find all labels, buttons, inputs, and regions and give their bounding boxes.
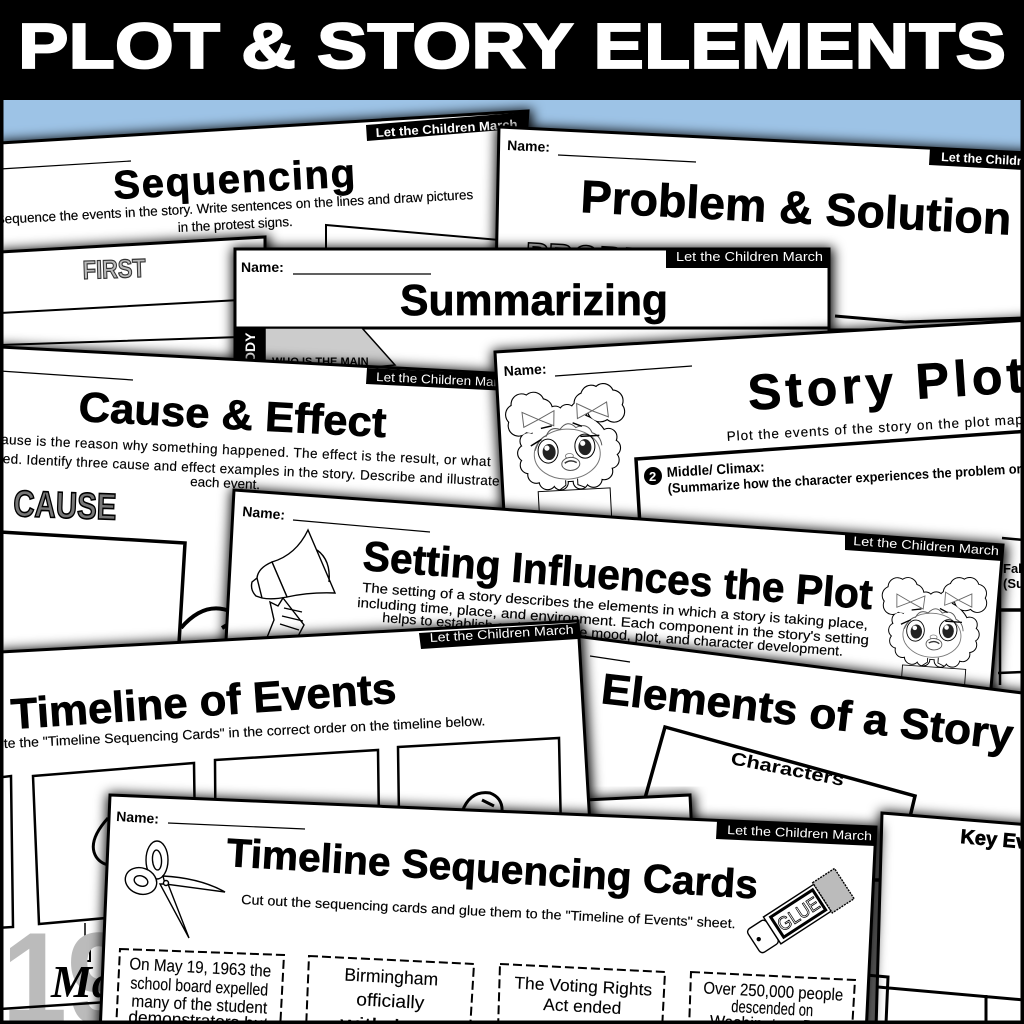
card 1 text: many of the student <box>131 991 268 1018</box>
number badge <box>644 467 662 485</box>
sidebar: body label: BODY <box>242 332 258 373</box>
card 2 text <box>338 965 442 1024</box>
tag: cards: Let the Children March <box>727 823 872 843</box>
illustration: girl with sign <box>875 572 988 707</box>
text: falling action: Fal <box>1003 561 1022 576</box>
name field <box>116 808 305 829</box>
card 2 text: officially <box>356 989 425 1013</box>
icon: scissors <box>122 841 225 938</box>
illustration: girl with sign <box>505 383 630 535</box>
card 4 text: descended on <box>731 997 814 1020</box>
sidebar: body label <box>235 328 265 388</box>
table lines <box>866 975 1024 1024</box>
card 3 text: The Voting Rights <box>514 973 653 1000</box>
name field: Name: <box>116 808 160 827</box>
card 4 <box>689 972 855 1024</box>
label: characters: Characters <box>729 748 846 790</box>
writing lines <box>0 300 240 345</box>
tag: cause <box>366 368 510 391</box>
text: setting description: including time, place, and environment. Each component in the story's setting <box>357 595 870 648</box>
name line <box>0 371 133 380</box>
illustration fragments <box>93 793 502 865</box>
card 1 text <box>128 954 272 1024</box>
name field: Name: <box>241 259 284 275</box>
text: setting description <box>357 580 870 659</box>
panel: cause and effect worksheet <box>0 347 510 660</box>
heading: timeline of events: Timeline of Events <box>9 665 398 739</box>
illustration: megaphone <box>252 530 335 640</box>
lower card <box>585 795 694 880</box>
tag: timeline <box>419 623 578 649</box>
icon: glue stick <box>744 868 854 958</box>
card 3 <box>498 964 665 1024</box>
label: cause: CAUSE <box>13 483 117 528</box>
heading: problem and solution: Problem & Solution <box>579 170 1013 245</box>
text: sequencing instructions: in the protest signs. <box>177 214 293 235</box>
text: timeline instructions: te the "Timeline Sequencing Cards" in the correct order on the timeline below. <box>3 713 486 751</box>
card 4 text: Over 250,000 people <box>703 978 844 1005</box>
icon: glue stick: GLUE <box>774 893 824 936</box>
name line <box>590 656 630 662</box>
panel: elements of a story worksheet <box>575 636 1024 1024</box>
panel: timeline of events worksheet <box>0 621 592 1024</box>
divider <box>235 326 829 330</box>
illustration fragment <box>181 608 232 628</box>
sign box <box>326 225 500 260</box>
card: characters <box>622 727 915 880</box>
heading: elements of a story: Elements of a Story <box>599 665 1016 760</box>
panel: problem and solution worksheet <box>495 127 1024 330</box>
name field: Name: <box>242 503 286 523</box>
timeline boxes <box>0 738 562 928</box>
cause box <box>0 532 185 660</box>
panel: story plot worksheet <box>495 320 1024 710</box>
text: falling action: (Su <box>1003 576 1024 591</box>
title banner <box>0 0 1024 100</box>
name field <box>507 137 696 162</box>
card 1 text: school board expelled <box>130 973 269 1000</box>
card 2 <box>306 956 474 1024</box>
panel: timeline sequencing cards worksheet <box>100 795 876 1024</box>
text: cause instructions: each event. <box>190 474 260 492</box>
card 3 text: Act ended <box>543 995 622 1018</box>
name field <box>503 361 692 379</box>
tag: sequencing: Let the Children March <box>375 117 518 140</box>
tag: summarizing <box>666 249 829 268</box>
script month: Ma <box>50 956 115 1007</box>
heading: setting influences the plot: Setting Influences the Plot <box>361 532 874 618</box>
tag: timeline: Let the Children March <box>429 623 574 645</box>
name line <box>0 161 131 169</box>
heading: summarizing: Summarizing <box>400 276 668 325</box>
text: setting description: helps to establish and shape the mood, plot, and character development. <box>382 610 844 659</box>
tag: summarizing: Let the Children March <box>676 250 823 264</box>
divider line <box>0 1002 108 1009</box>
card 1 text: On May 19, 1963 the <box>129 954 272 981</box>
text: falling action <box>1003 561 1024 591</box>
right plot box fragment <box>998 538 1024 685</box>
name field: Name: <box>503 361 547 379</box>
panel: key events worksheet <box>866 813 1024 1024</box>
plot box: middle climax <box>636 431 1024 610</box>
tag: cause: Let the Children Mar <box>376 370 498 389</box>
tag: setting <box>845 533 1003 561</box>
number badge: 2 <box>649 469 656 484</box>
lower lines <box>835 316 1024 322</box>
heading: timeline sequencing cards: Timeline Sequencing Cards <box>225 831 759 907</box>
text: who is the main: WHO IS THE MAIN <box>272 356 369 368</box>
name field: Name: <box>507 137 550 155</box>
title: PLOT & STORY ELEMENTS <box>18 10 1006 82</box>
panel: first <box>0 237 265 360</box>
panel: summarizing worksheet <box>235 249 829 400</box>
text: middle climax: Middle/ Climax: <box>666 459 765 480</box>
text: cards instructions: Cut out the sequencing cards and glue them to the "Timeline of Events" sheet. <box>241 892 736 931</box>
tag: cards <box>716 821 876 846</box>
label: first: FIRST <box>82 253 146 285</box>
panel: sequencing worksheet <box>0 111 528 360</box>
card 1 <box>116 949 284 1024</box>
text: sequencing instructions: Sequence the events in the story. Write sentences on the lines and draw pictures <box>0 187 474 227</box>
hanging tag <box>81 923 90 961</box>
name field <box>242 503 430 532</box>
card 4 text <box>703 978 844 1024</box>
tag: setting: Let the Children March <box>853 534 999 558</box>
gray panel <box>265 328 395 378</box>
heading: story plot: Story Plot <box>746 347 1024 421</box>
tag: sequencing <box>366 112 528 141</box>
heading: sequencing: Sequencing <box>112 151 356 208</box>
panel: setting influences the plot worksheet <box>225 490 1003 707</box>
card 3 text <box>514 973 653 1018</box>
label: problem: PROBLEM <box>525 236 696 283</box>
heading: cause and effect: Cause & Effect <box>78 383 388 446</box>
card 2 text: Birmingham <box>344 965 439 989</box>
text: setting description: The setting of a story describes the elements in which a story is taking place, <box>362 580 869 632</box>
text: cause instructions <box>0 431 500 492</box>
